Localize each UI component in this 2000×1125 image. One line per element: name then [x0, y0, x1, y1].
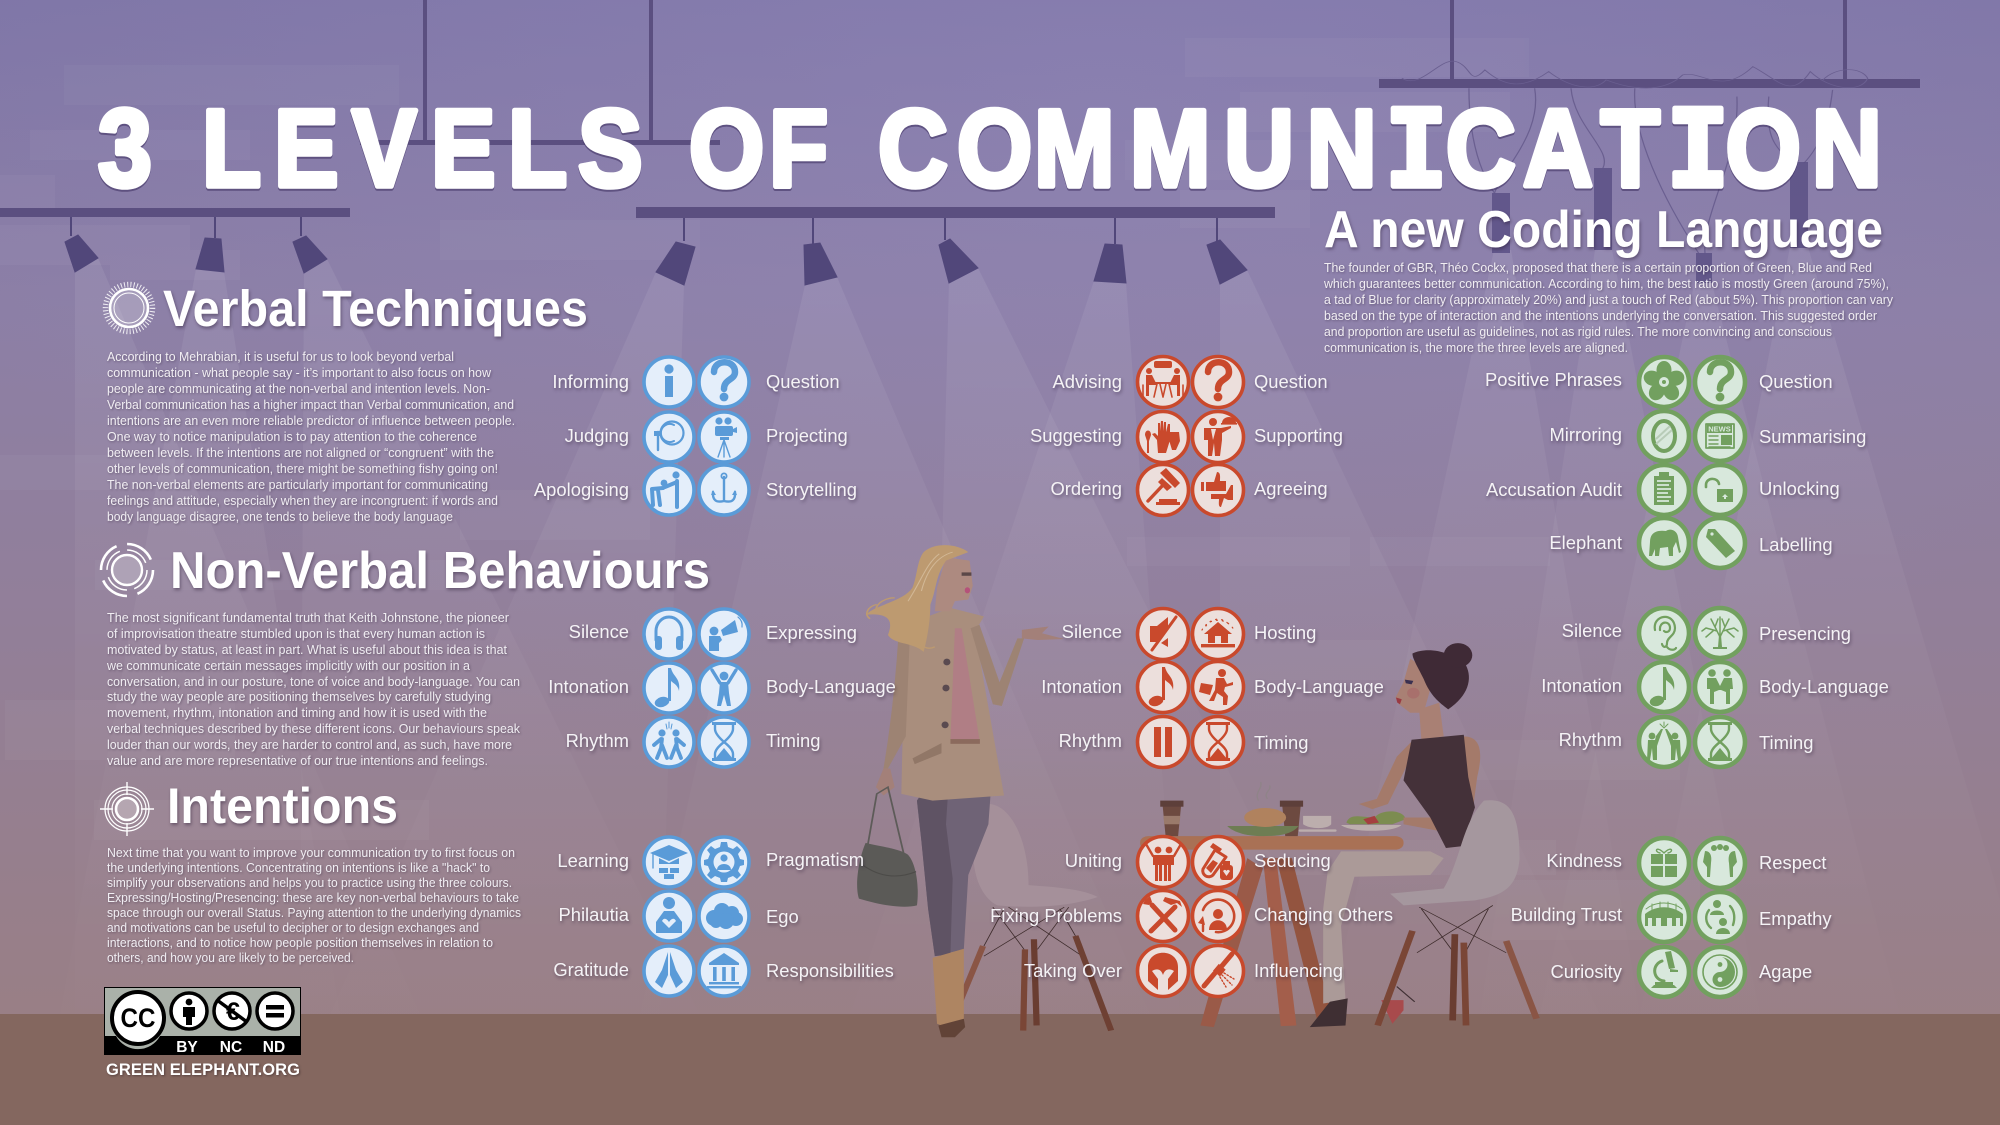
icon: cc: CC	[120, 1003, 156, 1033]
item: Seducing: Seducing	[1254, 850, 1331, 871]
title: CAT	[1446, 86, 1660, 209]
item: Body-Language: Body-Language	[1759, 676, 1889, 697]
spotlights	[65, 217, 1247, 285]
item: Mirroring: Mirroring	[1549, 424, 1622, 445]
item: Unlocking: Unlocking	[1759, 478, 1840, 499]
item: Intonation	[548, 663, 694, 713]
item: Labelling: Labelling	[1759, 534, 1833, 555]
item: Body-Language	[1192, 662, 1384, 712]
text block: verbal intro: body language disagree, one tends to believe the body language	[107, 509, 453, 524]
text block: verbal intro: According to Mehrabian, it is useful for us to look beyond verbal	[107, 349, 454, 364]
panel: blue icon column	[534, 357, 896, 996]
text block: non-verbal intro: movement, rhythm, intonation and timing and how it is used with the	[107, 705, 487, 720]
item: Informing: Informing	[552, 371, 629, 392]
illustration: cafe scene	[857, 545, 1537, 1037]
item: Timing: Timing	[1759, 732, 1814, 753]
item: Silence: Silence	[1562, 620, 1622, 641]
website: green elephant.org: GREEN ELEPHANT.ORG	[106, 1061, 300, 1079]
text block: non-verbal intro: we communicate certain messages implicitly with our position in a	[106, 658, 471, 673]
item: Pragmatism	[699, 837, 864, 887]
text block: verbal intro: intentions are an even more reliable predictor of influence between people.	[107, 413, 515, 428]
item: Empathy: Empathy	[1759, 908, 1832, 929]
icon: cc	[112, 992, 164, 1044]
item: Timing	[699, 717, 820, 767]
panel: green icon column	[1485, 357, 1889, 997]
panel: intentions text	[100, 778, 521, 965]
text block: verbal intro: people are communicating at the non-verbal and intention levels. Non-	[107, 381, 490, 396]
item: Ego: Ego	[766, 906, 799, 927]
heading: A new Coding Language: A new Coding Language	[1324, 201, 1883, 259]
item: Intonation	[1541, 662, 1689, 712]
text block: intentions intro: simplify your observations and helps you to practice using the three colours.	[107, 875, 512, 890]
item: Agreeing: Agreeing	[1254, 478, 1328, 499]
seated woman	[1310, 643, 1480, 1027]
text block: coding language: which guarantees better communication. According to him, the best ratio is mostly Green (around 75%),	[1323, 276, 1889, 291]
item: Body-Language: Body-Language	[1254, 676, 1384, 697]
text block: verbal intro: communication - what people say - it’s important to also focus on how	[107, 365, 491, 380]
item: Hosting	[1192, 608, 1316, 660]
item: Unlocking	[1695, 465, 1840, 515]
badge labels: NC	[220, 1039, 242, 1056]
text block: non-verbal intro: verbal techniques described by these different icons. Our behaviours speak	[107, 721, 520, 736]
text block: coding language: based on the type of interaction and the intentions underlying the conversation. This suggested order	[1324, 308, 1878, 323]
item: Elephant: Elephant	[1549, 532, 1622, 553]
light beams from the spotlights	[60, 247, 2000, 1015]
item: Hosting: Hosting	[1254, 622, 1316, 643]
item: Intonation: Intonation	[1541, 675, 1622, 696]
item: Learning: Learning	[557, 850, 629, 871]
text block: verbal intro: The non-verbal elements are particularly important for communicating	[107, 477, 488, 492]
title: 3 LEVELS OF COMMUN	[98, 86, 1377, 209]
item: Suggesting: Suggesting	[1030, 425, 1122, 446]
item: Gratitude	[553, 946, 694, 996]
text block: non-verbal intro: The most significant fundamental truth that Keith Johnstone, the pioneer	[107, 610, 510, 625]
item: Summarising	[1695, 411, 1866, 461]
item: Suggesting	[1030, 412, 1188, 462]
standing woman	[857, 545, 1064, 1037]
item: Intonation	[1041, 662, 1188, 712]
item: Storytelling	[699, 465, 857, 515]
item: Philautia	[558, 891, 694, 941]
item: Presencing: Presencing	[1759, 623, 1851, 644]
item: Elephant	[1549, 518, 1689, 568]
item: Accusation Audit	[1486, 465, 1689, 515]
item: Advising: Advising	[1052, 371, 1122, 392]
item: Timing	[1192, 716, 1308, 768]
item: Judging	[565, 412, 694, 462]
item: Seducing	[1192, 836, 1331, 888]
text block: coding language: The founder of GBR, Théo Cockx, proposed that there is a certain proportion of Green, Blue and Red	[1324, 260, 1872, 275]
item: Question: Question	[766, 371, 840, 392]
item: Agape	[1695, 947, 1812, 997]
item: Learning	[557, 837, 694, 887]
item: Ordering	[1050, 464, 1188, 516]
item: Presencing	[1695, 608, 1851, 658]
item: Gratitude: Gratitude	[553, 959, 629, 980]
item: Rhythm	[566, 717, 694, 767]
text block: verbal intro	[107, 349, 515, 524]
item: Projecting: Projecting	[766, 425, 848, 446]
item: Accusation Audit: Accusation Audit	[1486, 479, 1622, 500]
icon: segmented rings	[101, 544, 153, 596]
item: Empathy	[1695, 892, 1832, 942]
item: Apologising	[534, 465, 694, 515]
item: Expressing: Expressing	[766, 622, 857, 643]
text block: coding language: a tad of Blue for clarity (approximately 20%) and just a touch of Red (about 5%). This proportion can vary	[1324, 292, 1893, 307]
text block: verbal intro: feelings and attitude, especially when they are incongruent: if words and	[107, 493, 498, 508]
icon: no derivatives	[257, 993, 293, 1029]
panel: a new coding language	[1323, 201, 1893, 355]
text block: intentions intro: Next time that you want to improve your communication try to first focus on	[107, 845, 515, 860]
item: Respect: Respect	[1759, 852, 1826, 873]
item: Influencing	[1192, 946, 1343, 996]
item: Storytelling: Storytelling	[766, 479, 857, 500]
item: Curiosity	[1550, 947, 1689, 997]
item: Curiosity: Curiosity	[1550, 961, 1623, 982]
item: Intonation: Intonation	[548, 676, 629, 697]
item: Fixing Problems: Fixing Problems	[990, 905, 1122, 926]
item: Apologising: Apologising	[534, 479, 629, 500]
item: Rhythm: Rhythm	[1559, 729, 1622, 750]
item: Agreeing	[1192, 464, 1328, 516]
heading: Non-Verbal Behaviours: Non-Verbal Behaviours	[170, 542, 710, 600]
icon: crosshair target	[100, 782, 154, 836]
item: Question: Question	[1759, 371, 1833, 392]
title: ON	[1726, 86, 1882, 209]
chair right	[1378, 800, 1537, 1025]
item: Building Trust: Building Trust	[1511, 904, 1622, 925]
item: Expressing	[699, 609, 857, 659]
item: Taking Over: Taking Over	[1024, 960, 1122, 981]
item: Kindness: Kindness	[1546, 850, 1622, 871]
text block: non-verbal intro: louder than our words, they are harder to control and, as such, have more	[107, 737, 512, 752]
item: Supporting	[1192, 412, 1343, 462]
item: Rhythm	[1059, 716, 1188, 768]
item: Uniting: Uniting	[1065, 850, 1122, 871]
badge labels: ND	[263, 1039, 285, 1056]
item: Building Trust	[1511, 892, 1689, 942]
title: I	[1385, 88, 1447, 222]
item: Question	[1192, 356, 1328, 408]
icon: non-commercial: €	[226, 998, 240, 1026]
text block: intentions intro: Expressing/Hosting/Presencing: these are key non-verbal behaviours to take	[107, 890, 519, 905]
text block: non-verbal intro: motivated by status, at least in part. What is useful about this idea is that	[107, 642, 507, 657]
ceiling rods and track bars	[0, 0, 1920, 218]
item: Taking Over	[1024, 946, 1188, 996]
item: Uniting	[1065, 836, 1188, 888]
item: Body-Language	[1695, 662, 1889, 712]
text block: verbal intro: One way to notice manipulation is to pay attention to the coherence	[107, 429, 477, 444]
text block: non-verbal intro: conversation, and in our posture, tone of voice and body-language. You can	[107, 674, 520, 689]
item: Question: Question	[1254, 371, 1328, 392]
item: Mirroring	[1549, 411, 1689, 461]
text block: intentions intro: interactions, and to notice how people position themselves in relation to	[107, 935, 493, 950]
item: Rhythm: Rhythm	[566, 730, 629, 751]
text block: intentions intro: the underlying intentions. Concentrating on intentions is like a "hack" to	[107, 860, 490, 875]
icon: radiant circle	[106, 284, 152, 332]
item: Question	[1695, 357, 1833, 407]
item: Timing: Timing	[766, 730, 820, 751]
badge labels: BY	[176, 1039, 198, 1056]
item: Fixing Problems	[990, 890, 1188, 942]
item: Ego	[699, 891, 799, 941]
item: Positive Phrases: Positive Phrases	[1485, 369, 1622, 390]
item: Responsibilities	[699, 946, 894, 996]
item: Summarising: Summarising	[1759, 426, 1866, 447]
panel: red icon column	[990, 356, 1393, 996]
text block: intentions intro: and motivations can be useful to decipher or to design exchanges and	[107, 920, 479, 935]
item: Ordering: Ordering	[1050, 478, 1122, 499]
chair left	[961, 804, 1111, 1031]
badge labels	[176, 1039, 285, 1056]
heading: Intentions: Intentions	[167, 778, 398, 834]
item: Changing Others: Changing Others	[1254, 904, 1393, 925]
text block: intentions intro	[107, 845, 521, 965]
pendant lamps and wires	[1402, 61, 1868, 283]
text block: verbal intro: between levels. If the intentions are not aligned or “congruent” with the	[107, 445, 494, 460]
panel: verbal techniques text	[106, 280, 588, 524]
item: Timing: Timing	[1254, 732, 1308, 753]
item: Rhythm: Rhythm	[1059, 730, 1122, 751]
item: Rhythm	[1559, 717, 1689, 767]
text block: non-verbal intro: of improvisation theatre stumbled upon is that every human action is	[107, 626, 485, 641]
item: Judging: Judging	[565, 425, 629, 446]
item: Silence	[569, 609, 694, 659]
text block: verbal intro: other levels of communication, there might be something fishy going on!	[107, 461, 498, 476]
text block: intentions intro: space through our overall Status. Paying attention to the underlying dynamics	[107, 905, 521, 920]
item: Respect	[1695, 838, 1826, 888]
item: Intonation: Intonation	[1041, 676, 1122, 697]
item: Changing Others	[1192, 890, 1393, 942]
title: I	[1667, 88, 1729, 222]
text block: non-verbal intro: study the way people are positioning themselves by carefully studying	[107, 689, 491, 704]
table with food	[1140, 782, 1406, 1027]
item: Philautia: Philautia	[558, 904, 630, 925]
heading: Verbal Techniques: Verbal Techniques	[163, 280, 588, 337]
icon: attribution	[171, 993, 207, 1029]
item: Question	[699, 357, 840, 407]
creative commons badge	[104, 987, 301, 1056]
title	[98, 86, 1882, 222]
text block: non-verbal intro	[106, 610, 520, 768]
item: Projecting	[699, 412, 848, 462]
text block: coding language	[1323, 260, 1893, 355]
text block: intentions intro: others, and how you are likely to be perceived.	[107, 950, 354, 965]
item: Timing	[1695, 717, 1814, 767]
item: Influencing: Influencing	[1254, 960, 1343, 981]
item: Positive Phrases	[1485, 357, 1689, 407]
item: Advising	[1052, 356, 1188, 408]
item: Kindness	[1546, 838, 1689, 888]
item: Pragmatism: Pragmatism	[766, 849, 864, 870]
icon: non-commercial	[214, 993, 250, 1029]
floor	[0, 1014, 2000, 1125]
text block: non-verbal intro: value and are more representative of our true intentions and feelings.	[107, 753, 488, 768]
item: Silence	[1562, 608, 1689, 658]
item: Body-Language	[699, 663, 896, 713]
item: Responsibilities: Responsibilities	[766, 960, 894, 981]
item: Agape: Agape	[1759, 961, 1812, 982]
item: Informing	[552, 357, 694, 407]
text block: coding language: communication is, the more the three levels are aligned.	[1324, 340, 1628, 355]
item: Labelling	[1695, 518, 1833, 568]
item: Body-Language: Body-Language	[766, 676, 896, 697]
text block: verbal intro: Verbal communication has a higher impact than Verbal communication, and	[107, 397, 514, 412]
item: Supporting: Supporting	[1254, 425, 1343, 446]
panel: non-verbal behaviours text	[101, 542, 710, 768]
item: Silence: Silence	[569, 621, 629, 642]
item: Silence: Silence	[1062, 621, 1122, 642]
text block: coding language: and proportion are useful as guidelines, not as rigid rules. The more convincing and conscious	[1324, 324, 1832, 339]
item: Silence	[1062, 608, 1188, 660]
